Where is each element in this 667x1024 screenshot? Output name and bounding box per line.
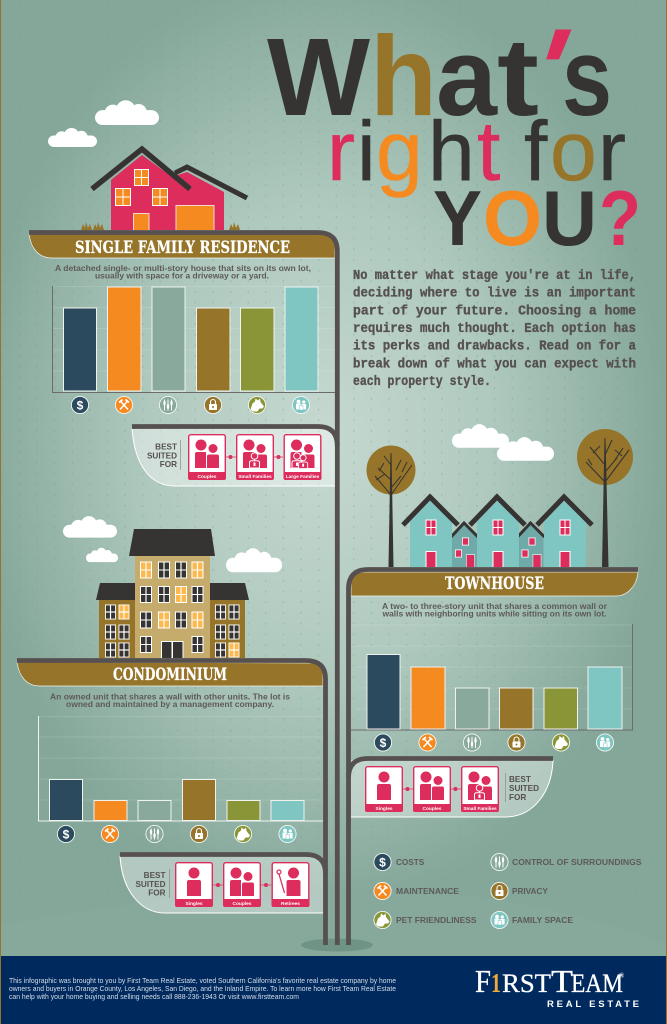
best suited for: townhouse <box>348 758 553 817</box>
title: ? <box>599 174 641 262</box>
panel: condominium <box>17 529 326 945</box>
title: i <box>357 104 376 198</box>
banner: condominium: CONDOMINIUM <box>113 665 227 684</box>
best suited for: condominium: Singles <box>185 901 203 907</box>
title: r <box>598 104 626 198</box>
logo: First Team Real Estate: T <box>551 963 574 999</box>
banner: condominium <box>17 660 326 945</box>
description <box>381 602 608 618</box>
best suited for: single family: Large Families <box>286 474 320 480</box>
title: g <box>376 104 423 198</box>
title: f <box>524 104 548 198</box>
best suited for: single family <box>132 426 337 486</box>
logo: First Team Real Estate: F <box>475 963 491 999</box>
title: t <box>497 16 539 139</box>
title: s <box>562 16 612 139</box>
logo: First Team Real Estate: ® <box>619 972 625 980</box>
ground shadow under pipes <box>301 938 373 952</box>
illustration: condominium building <box>96 529 249 658</box>
intro paragraph: part of your future. Choosing a home <box>353 304 636 319</box>
description <box>55 264 311 280</box>
best suited for: townhouse: BEST <box>509 775 531 784</box>
intro paragraph: its perks and drawbacks. Read on for a <box>353 340 636 355</box>
illustration: single family house <box>81 149 247 230</box>
legend: COSTS <box>396 858 425 867</box>
description: A detached single- or multi-story house that sits on its own lot, <box>55 264 311 273</box>
title: ' <box>510 5 587 138</box>
legend: $ <box>379 856 386 870</box>
description: A two- to three-story unit that shares a common wall or <box>382 602 608 611</box>
icons row: townhouse <box>374 734 614 751</box>
logo: First Team Real Estate: REAL ESTATE <box>547 999 639 1010</box>
banner: townhouse <box>348 570 638 945</box>
banner: townhouse: TOWNHOUSE <box>445 574 544 593</box>
best suited for: townhouse: Singles <box>375 806 393 812</box>
best suited for: condominium <box>120 854 326 913</box>
title: O <box>483 174 542 262</box>
legend <box>374 853 642 929</box>
title <box>267 5 641 262</box>
best suited for: single family: FOR <box>160 460 177 469</box>
icons row: single family <box>71 396 310 414</box>
legend: MAINTENANCE <box>396 887 460 896</box>
footer <box>1 956 666 1024</box>
icons row: condominium: $ <box>63 828 70 842</box>
icons row: single family: $ <box>77 398 84 412</box>
intro paragraph: requires much thought. Each option has <box>353 322 636 337</box>
footer text: can help with your home buying and selling needs call 888-236-1943 Or visit www.firstteam.com <box>9 992 299 1001</box>
legend: FAMILY SPACE <box>512 916 574 925</box>
best suited for: townhouse: Couples <box>423 806 442 812</box>
best suited for: townhouse: SUITED <box>509 784 539 793</box>
best suited for: single family: Couples <box>198 474 217 480</box>
title: a <box>436 16 498 139</box>
title: h <box>428 104 475 198</box>
legend: PET FRIENDLINESS <box>396 916 477 925</box>
illustration: townhouses and trees <box>366 429 633 567</box>
legend: PRIVACY <box>512 887 548 896</box>
description: An owned unit that shares a wall with other units. The lot is <box>50 692 290 702</box>
best suited for: condominium: FOR <box>148 888 166 898</box>
bar chart: single family <box>52 286 335 392</box>
intro paragraph: No matter what stage you're at in life, <box>353 269 636 284</box>
bar chart: townhouse <box>351 624 632 730</box>
description <box>50 692 290 709</box>
logo: First Team Real Estate <box>475 963 639 1010</box>
title: o <box>550 104 597 198</box>
intro paragraph: deciding where to live is an important <box>353 287 636 302</box>
title: U <box>542 174 597 262</box>
best suited for: townhouse: Small Families <box>463 806 497 812</box>
legend: CONTROL OF SURROUNDINGS <box>512 858 642 867</box>
panel: single family residence <box>29 149 337 945</box>
footer text <box>9 976 396 1001</box>
best suited for: townhouse: FOR <box>509 793 526 802</box>
description: usually with space for a driveway or a yard. <box>95 272 269 280</box>
title: r <box>327 104 355 198</box>
title: t <box>477 104 500 198</box>
best suited for: single family: SUITED <box>147 451 177 460</box>
best suited for: single family: BEST <box>155 442 177 452</box>
title: W <box>267 16 370 139</box>
best suited for: condominium: BEST <box>144 871 166 880</box>
bar chart: condominium <box>38 716 323 821</box>
footer text: owners and buyers in Orange County, Los Angeles, San Diego, and the Inland Empire. To learn more how First Team Real Estate <box>9 984 396 993</box>
description: walls with neighboring units while sitting on its own lot. <box>381 610 606 618</box>
best suited for: single family: Small Families <box>238 474 272 480</box>
footer text: This infographic was brought to you by First Team Real Estate, voted Southern California's favorite real estate company by home <box>9 976 396 985</box>
title: h <box>370 13 437 139</box>
best suited for: condominium: Couples <box>233 901 252 907</box>
intro paragraph: each property style. <box>353 375 491 390</box>
best suited for: condominium: SUITED <box>135 880 166 889</box>
intro paragraph: break down of what you can expect with <box>353 357 636 372</box>
logo: First Team Real Estate: 1 <box>491 968 501 998</box>
icons row: condominium <box>57 825 296 843</box>
banner: single family residence <box>29 232 337 945</box>
title: Y <box>433 174 482 262</box>
icons row: townhouse: $ <box>380 736 387 750</box>
intro paragraph <box>353 269 636 390</box>
panel: townhouse <box>348 429 638 945</box>
best suited for: condominium: Retirees <box>281 901 300 907</box>
logo: First Team Real Estate: EAM <box>571 969 623 998</box>
banner: single family residence: SINGLE FAMILY RESIDENCE <box>75 238 290 257</box>
logo: First Team Real Estate: RST <box>502 969 551 998</box>
clouds <box>48 100 554 572</box>
description: owned and maintained by a management company. <box>66 700 274 709</box>
